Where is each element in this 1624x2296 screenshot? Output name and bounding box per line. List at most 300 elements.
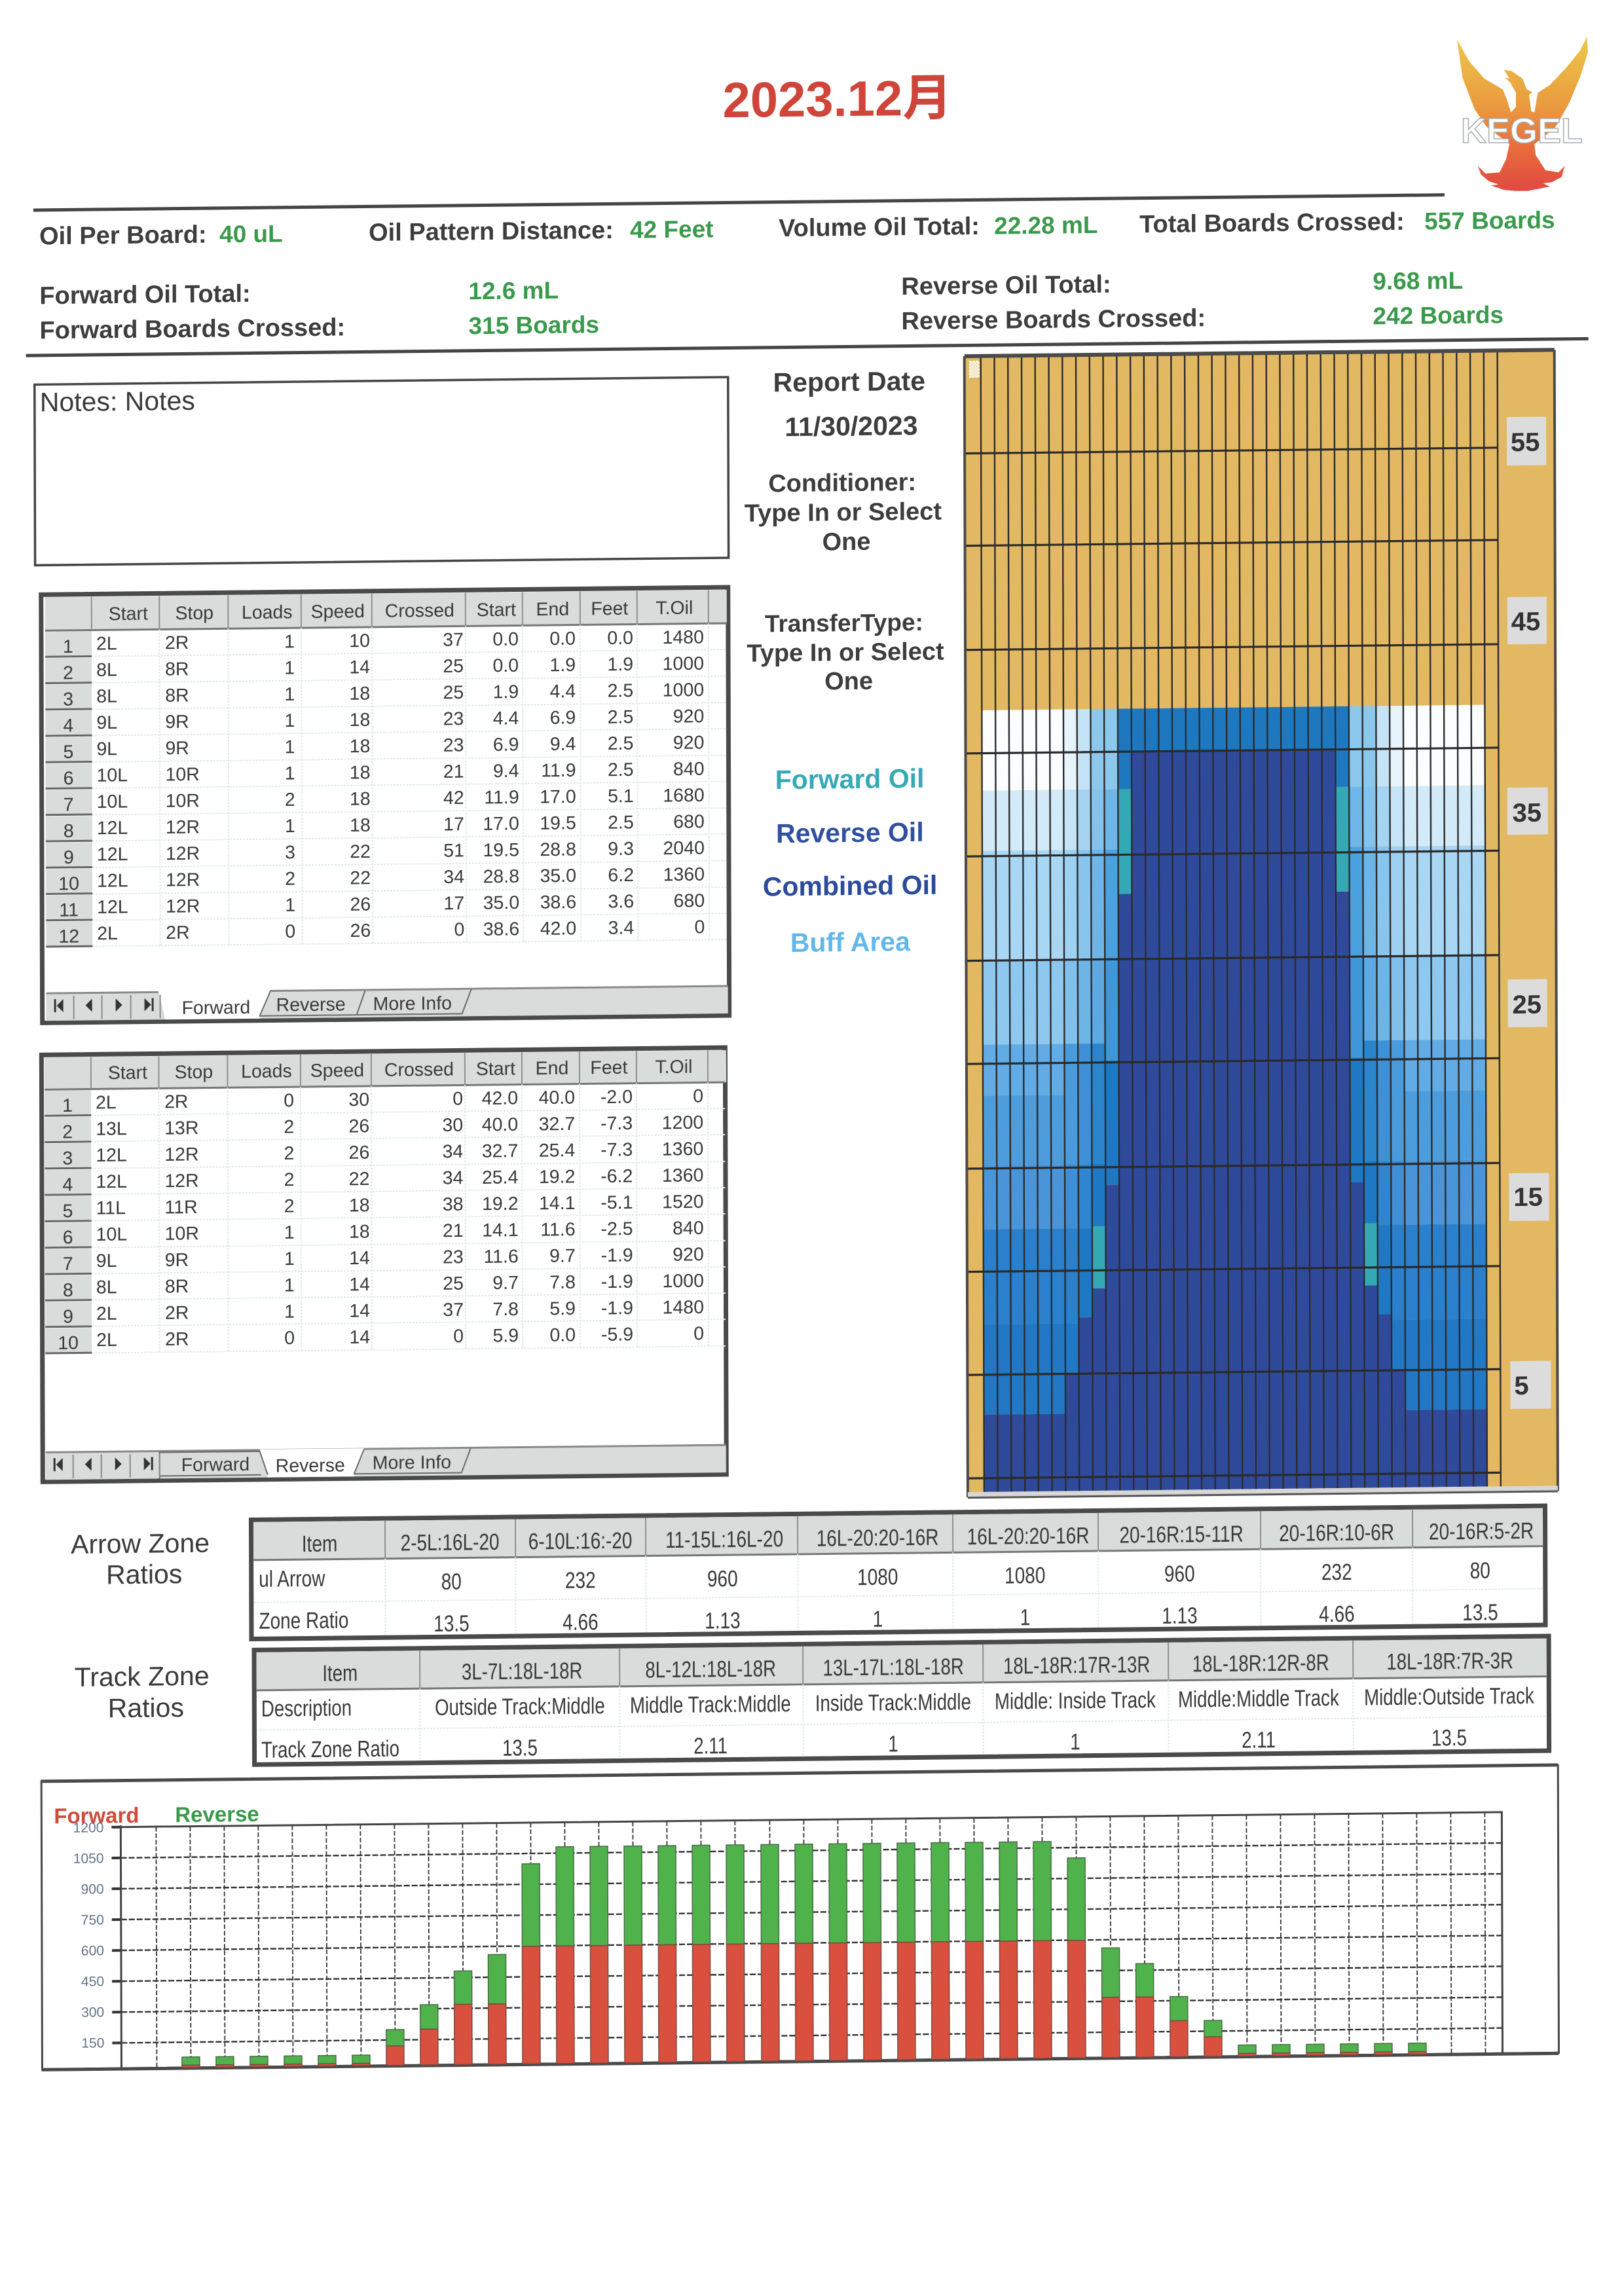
forward table rows: 0.0 <box>492 655 519 676</box>
reverse table rows: 0.0 <box>549 1324 576 1346</box>
reverse table rows: 10L <box>96 1224 127 1245</box>
reverse table rows: 34 <box>443 1167 464 1189</box>
chart legend: Reverse <box>175 1802 259 1827</box>
forward table rows: 2R <box>165 632 189 653</box>
forward table rows: 4.4 <box>550 681 576 702</box>
forward table rows: 6.9 <box>493 734 519 756</box>
forward table rows: 2.5 <box>608 759 634 780</box>
forward table rows: 1 <box>284 657 295 679</box>
arrow zone ratio row: Zone Ratio <box>259 1607 348 1634</box>
reverse table header: Crossed <box>384 1059 454 1081</box>
report info: date: Report Date <box>773 366 925 397</box>
reverse table rows: 25.4 <box>539 1140 575 1161</box>
track zone ratios heading: Ratios <box>108 1692 184 1723</box>
y axis labels: 1200 <box>73 1820 103 1836</box>
transfer type block: One <box>824 668 873 695</box>
reverse table rows: 14 <box>349 1300 370 1322</box>
distance marker 5: 5 <box>1514 1372 1529 1400</box>
forward table rows: 4 <box>63 716 73 737</box>
reverse table rows: 42.0 <box>482 1088 518 1109</box>
reverse table rows: 19.2 <box>482 1194 519 1214</box>
forward table header: Stop <box>175 603 213 624</box>
arrow zone header row: 6-10L:16:-20 <box>528 1527 633 1554</box>
distance marker 5 <box>1510 1360 1551 1409</box>
arrow zone ul arrow row: ul Arrow <box>259 1565 325 1592</box>
reverse table rows: -6.2 <box>600 1166 633 1187</box>
forward table rows: 18 <box>349 683 370 704</box>
forward table rows: 12L <box>97 818 128 839</box>
track zone description row: Middle:Outside Track <box>1364 1683 1534 1710</box>
forward table rows: 0 <box>454 919 464 940</box>
forward table rows: 1 <box>284 684 295 705</box>
arrow zone ul arrow row: 1080 <box>857 1563 898 1590</box>
track zone description row <box>261 1682 1534 1722</box>
forward table rows: 920 <box>673 706 704 727</box>
reverse table sheet tabs: Forward <box>181 1454 249 1476</box>
forward table rows: 18 <box>350 710 370 731</box>
reverse table rows: 14 <box>349 1327 370 1348</box>
reverse table rows: 920 <box>673 1244 704 1266</box>
reverse table header: Loads <box>241 1061 292 1082</box>
forward table rows: 5.1 <box>608 786 634 807</box>
arrow zone ratio row: 4.66 <box>563 1609 599 1635</box>
forward table rows: 1.9 <box>549 655 576 676</box>
oil pattern lane graph <box>965 348 1558 1499</box>
reverse table rows: 40.0 <box>539 1087 575 1108</box>
forward table rows: 12R <box>166 869 200 891</box>
arrow zone ul arrow row: 80 <box>1470 1557 1490 1584</box>
forward table header: T.Oil <box>655 598 693 619</box>
header rule top <box>33 193 1445 211</box>
forward table rows: 9L <box>96 712 117 733</box>
forward table rows: 3 <box>63 689 73 710</box>
arrow zone header row: Item <box>302 1530 337 1557</box>
forward table rows: 10L <box>97 765 128 786</box>
forward table rows: 3 <box>285 842 295 863</box>
forward totals: 315 Boards <box>468 311 599 339</box>
track zone header row: Item <box>322 1660 358 1686</box>
y axis labels: 450 <box>81 1974 104 1990</box>
forward table rows: 34 <box>443 867 464 888</box>
reverse table rows: 13R <box>164 1118 199 1139</box>
conditioner block: Type In or Select <box>745 498 942 528</box>
forward totals: Forward Boards Crossed: <box>39 314 345 344</box>
forward table rows: 2 <box>285 790 295 811</box>
reverse table rows: 11.6 <box>540 1219 576 1241</box>
forward table rows: 37 <box>443 629 464 651</box>
reverse table rows: -7.3 <box>600 1139 633 1161</box>
y axis labels: 750 <box>81 1912 104 1928</box>
forward table rows: 17.0 <box>483 813 519 835</box>
reverse table rows: 8L <box>96 1277 117 1298</box>
reverse table rows: 22 <box>349 1169 369 1190</box>
reverse table header <box>45 1050 726 1089</box>
forward table rows: 25 <box>443 656 464 677</box>
reverse table header: Stop <box>175 1062 213 1083</box>
arrow zone ratios heading: Ratios <box>106 1559 182 1590</box>
forward table rows: 11.9 <box>484 787 519 809</box>
reverse load table <box>41 1048 728 1482</box>
selected cell marker <box>970 361 979 377</box>
forward table rows: 1000 <box>663 680 704 701</box>
arrow zone ul arrow row: 80 <box>441 1568 462 1595</box>
forward table rows: 10L <box>97 791 128 812</box>
y axis labels: 300 <box>81 2005 104 2020</box>
reverse table rows: 9.7 <box>492 1273 519 1294</box>
forward table rows: 1 <box>285 816 295 837</box>
track zone ratios heading <box>75 1661 210 1724</box>
reverse table rows: 2L <box>96 1092 117 1113</box>
forward table rows: 10R <box>166 764 200 786</box>
forward table rows: 12R <box>166 816 200 838</box>
reverse table rows: 5.9 <box>492 1325 519 1347</box>
forward table rows: 2L <box>97 923 118 944</box>
reverse table sheet tabs: Reverse <box>276 1455 345 1477</box>
reverse table rows: 840 <box>673 1218 704 1239</box>
reverse table header: Start <box>108 1063 147 1084</box>
reverse table rows: 0 <box>693 1085 703 1107</box>
track zone header row: 8L-12L:18L-18R <box>645 1655 776 1683</box>
arrow zone ul arrow row <box>259 1552 1490 1597</box>
reverse oil bars <box>181 1838 1426 2066</box>
reverse table rows: -1.9 <box>601 1298 633 1319</box>
forward table rows: 680 <box>674 890 705 911</box>
right half oil bands <box>1335 705 1487 1488</box>
arrow zone ratio row: 13.5 <box>1462 1599 1498 1626</box>
stats row: oil per board, distance, volume, boards crossed: 40 uL <box>219 220 283 247</box>
arrow zone ul arrow row: 232 <box>565 1567 596 1593</box>
reverse table rows: 3 <box>62 1148 73 1169</box>
reverse table rows: 38 <box>443 1194 464 1215</box>
reverse table rows: 30 <box>442 1115 463 1136</box>
forward table sheet tabs <box>46 985 728 1021</box>
conditioner block <box>745 468 942 557</box>
forward table rows: 9.4 <box>493 761 519 782</box>
reverse table rows: 40.0 <box>482 1114 518 1135</box>
arrow zone header row: 11-15L:16L-20 <box>665 1525 783 1553</box>
forward table rows: 12R <box>166 843 200 864</box>
reverse totals: Reverse Boards Crossed: <box>901 304 1206 335</box>
arrow zone ratio row: 4.66 <box>1319 1601 1355 1627</box>
reverse table sheet tabs: More Info <box>373 1452 451 1474</box>
reverse table rows: 8 <box>63 1280 73 1301</box>
forward table header: Loads <box>242 602 293 623</box>
forward table rows: 1360 <box>663 864 705 885</box>
reverse table rows: -5.9 <box>601 1324 633 1345</box>
reverse table rows: 8R <box>165 1276 189 1297</box>
reverse table header: Start <box>476 1059 515 1080</box>
forward and reverse oil bar chart <box>41 1765 1559 2069</box>
track zone header row: 18L-18R:12R-8R <box>1192 1649 1329 1677</box>
reverse table rows: 10 <box>58 1332 79 1354</box>
arrow zone header row: 16L-20:20-16R <box>817 1524 939 1551</box>
forward table header: Crossed <box>385 600 454 622</box>
forward table rows: 1 <box>284 631 295 652</box>
forward table rows: 10 <box>58 873 79 894</box>
logo wordmark: KEGEL <box>1461 111 1583 151</box>
forward table rows: 920 <box>673 732 704 754</box>
track zone ratio row: 2.11 <box>1242 1726 1276 1753</box>
distance marker 55: 55 <box>1511 428 1540 457</box>
track zone header row: 13L-17L:18L-18R <box>823 1653 964 1681</box>
reverse table rows: 34 <box>443 1141 463 1162</box>
report info: date <box>773 366 925 442</box>
reverse table rows: 18 <box>349 1195 370 1216</box>
forward table rows: 18 <box>350 762 371 784</box>
track zone ratio row <box>261 1724 1467 1764</box>
oil legend: Buff Area <box>790 926 911 958</box>
stats row: oil per board, distance, volume, boards crossed: Total Boards Crossed: <box>1139 208 1405 238</box>
arrow zone ul arrow row: 960 <box>707 1565 738 1592</box>
arrow zone ratio row: 1 <box>873 1605 883 1631</box>
reverse table rows: 2R <box>164 1091 189 1112</box>
forward table rows: 12 <box>58 926 79 947</box>
forward table rows: 1 <box>63 636 73 657</box>
forward table rows: 0.0 <box>549 629 576 649</box>
forward table rows: 1000 <box>663 653 704 674</box>
forward table sheet tabs: Reverse <box>276 994 346 1015</box>
forward table rows: 9R <box>165 738 189 759</box>
forward table rows: 9 <box>64 847 74 868</box>
forward table rows: 12L <box>97 896 128 918</box>
reverse table rows: 1 <box>284 1248 295 1269</box>
transfer type block <box>747 608 944 697</box>
forward table rows: 3.4 <box>608 917 634 939</box>
forward table rows: 2.5 <box>608 733 633 754</box>
reverse table rows <box>45 1084 704 1354</box>
forward table rows: 8 <box>64 821 74 842</box>
arrow zone header row: 20-16R:15-11R <box>1119 1521 1244 1548</box>
track zone ratio row: 13.5 <box>1431 1724 1467 1751</box>
forward table rows: 17 <box>443 814 464 835</box>
forward table rows: 0 <box>694 917 705 938</box>
forward table rows: 18 <box>350 788 371 810</box>
reverse table rows: 13L <box>96 1118 127 1140</box>
forward table rows: 38.6 <box>483 919 519 940</box>
reverse table rows: 9.7 <box>549 1245 576 1267</box>
reverse table rows: 25 <box>443 1273 464 1294</box>
stats row: oil per board, distance, volume, boards crossed: Volume Oil Total: <box>779 213 980 242</box>
report info: date: 11/30/2023 <box>784 410 918 442</box>
forward table rows: 10 <box>349 630 370 651</box>
forward table rows: 51 <box>443 840 464 862</box>
reverse table rows: -2.5 <box>600 1218 633 1240</box>
arrow zone ratios heading <box>71 1528 210 1590</box>
reverse table rows: 2 <box>284 1117 294 1138</box>
reverse table rows: 2 <box>62 1121 73 1142</box>
forward table rows: 26 <box>350 894 371 915</box>
track zone description row: Outside Track:Middle <box>435 1692 605 1721</box>
conditioner block: One <box>822 528 871 556</box>
transfer type block: Type In or Select <box>747 638 944 668</box>
reverse table rows: 7.8 <box>492 1299 519 1320</box>
reverse table rows: -1.9 <box>601 1271 633 1292</box>
reverse table rows: 4 <box>62 1175 73 1195</box>
forward table rows: 19.5 <box>483 839 519 861</box>
reverse totals: 9.68 mL <box>1373 267 1463 295</box>
reverse table rows: -5.1 <box>600 1192 633 1213</box>
reverse table rows: 1480 <box>663 1297 704 1319</box>
forward table rows: 17.0 <box>540 786 576 808</box>
oil legend: Combined Oil <box>763 870 937 902</box>
forward table rows: 11.9 <box>541 760 576 781</box>
forward table rows: 6.9 <box>550 707 576 729</box>
forward table rows: 26 <box>350 920 371 941</box>
track zone description row: Middle:Middle Track <box>1178 1685 1339 1712</box>
reverse table rows: 14 <box>349 1274 370 1295</box>
reverse table rows: 32.7 <box>482 1140 518 1162</box>
forward table rows: 680 <box>673 811 705 833</box>
forward table rows: 3.6 <box>608 891 634 913</box>
forward table rows: 4.4 <box>493 708 519 729</box>
forward table rows: 2040 <box>663 837 705 859</box>
oil legend <box>762 763 938 958</box>
reverse table rows: 2L <box>96 1303 117 1324</box>
forward table rows: 22 <box>350 841 371 862</box>
forward table header: End <box>536 599 569 620</box>
distance marker 25: 25 <box>1512 991 1541 1019</box>
forward table rows: 23 <box>443 735 464 756</box>
reverse totals: Reverse Oil Total: <box>901 271 1111 301</box>
track zone ratio row: 1 <box>1070 1728 1080 1755</box>
reverse totals: 242 Boards <box>1373 301 1504 329</box>
forward table rows: 8R <box>165 659 189 680</box>
lane oil colour bands <box>982 705 1487 1492</box>
arrow zone header row: 2-5L:16L-20 <box>401 1529 500 1556</box>
forward table header <box>45 590 727 630</box>
reverse table rows: 0 <box>693 1323 704 1344</box>
reverse table rows: 2 <box>284 1143 294 1164</box>
reverse table rows: 1520 <box>662 1192 704 1212</box>
y axis labels: 900 <box>81 1882 104 1897</box>
reverse table rows: 0 <box>284 1090 294 1111</box>
stats row: oil per board, distance, volume, boards crossed: 22.28 mL <box>994 211 1098 240</box>
forward load table <box>41 587 729 1023</box>
forward table rows: 9L <box>96 738 117 759</box>
forward table rows: 23 <box>443 708 464 729</box>
arrow zone ratios table <box>251 1506 1545 1639</box>
reverse table rows: 6 <box>63 1227 73 1248</box>
forward table rows: 2.5 <box>608 706 633 728</box>
reverse table rows: 25.4 <box>482 1167 519 1188</box>
header rule bottom <box>26 337 1589 357</box>
reverse table rows: 9 <box>63 1306 73 1327</box>
reverse table rows: 12L <box>96 1145 127 1166</box>
forward table rows: 7 <box>64 794 74 815</box>
reverse table rows: 37 <box>443 1300 464 1321</box>
reverse table rows: 0 <box>284 1328 295 1349</box>
stats row: oil per board, distance, volume, boards crossed: 42 Feet <box>630 215 714 244</box>
reverse table rows: 19.2 <box>539 1166 575 1188</box>
forward table sheet tabs: More Info <box>373 993 452 1015</box>
forward table rows: 12L <box>97 844 128 865</box>
arrow zone ul arrow row: 960 <box>1164 1560 1195 1587</box>
reverse table rows: 14.1 <box>539 1193 576 1214</box>
reverse totals <box>901 266 1504 335</box>
reverse table rows: 2R <box>165 1329 189 1350</box>
forward table rows: 0.0 <box>607 628 633 649</box>
forward table rows: 25 <box>443 682 464 703</box>
forward table rows: 14 <box>349 657 370 678</box>
conditioner block: Conditioner: <box>768 469 916 498</box>
distance marker 45 <box>1507 597 1547 644</box>
forward table rows: 28.8 <box>483 866 519 887</box>
notes box: Notes: Notes <box>40 386 195 417</box>
reverse table rows: 2 <box>284 1169 294 1190</box>
forward table rows: 1 <box>284 710 295 731</box>
reverse table rows: 11.6 <box>483 1246 519 1267</box>
forward table rows: 18 <box>350 736 370 757</box>
distance lines <box>965 448 1501 1478</box>
track zone header row: 18L-18R:17R-13R <box>1003 1651 1150 1679</box>
distance marker 45: 45 <box>1511 608 1540 636</box>
forward table rows: 38.6 <box>540 892 576 913</box>
left half oil bands <box>982 708 1134 1492</box>
reverse table rows: 26 <box>349 1142 369 1163</box>
reverse table rows: 7.8 <box>549 1272 576 1293</box>
forward table rows: 11 <box>59 900 79 921</box>
reverse table sheet tabs <box>46 1444 726 1480</box>
forward table rows: 42.0 <box>540 918 576 939</box>
reverse table rows: 2 <box>284 1195 295 1217</box>
y axis labels: 150 <box>81 2035 104 2051</box>
reverse table rows: 11L <box>96 1197 126 1219</box>
transfer type block: TransferType: <box>765 609 923 637</box>
title: 2023.12月 <box>722 70 952 128</box>
forward table rows: 19.5 <box>540 812 576 834</box>
forward table rows: 1 <box>285 737 295 757</box>
forward table rows: 0 <box>285 921 295 942</box>
track zone description row: Middle Track:Middle <box>630 1690 791 1718</box>
forward table rows: 18 <box>350 815 371 836</box>
forward table rows: 1.9 <box>607 654 633 675</box>
forward table rows: 35.0 <box>540 866 576 886</box>
arrow zone ul arrow row: 1080 <box>1005 1562 1045 1588</box>
forward table rows: 6.2 <box>608 865 634 886</box>
forward table rows: 0.0 <box>492 629 519 650</box>
reverse table rows: -2.0 <box>600 1087 633 1108</box>
forward table rows: 1480 <box>663 627 704 648</box>
reverse table rows: 12R <box>164 1144 199 1165</box>
track zone header row <box>322 1647 1513 1686</box>
distance marker 35: 35 <box>1512 799 1541 828</box>
arrow zone header row: 20-16R:5-2R <box>1429 1518 1534 1544</box>
forward table rows: 10R <box>166 790 200 812</box>
track zone ratio row: 13.5 <box>502 1734 538 1761</box>
oil legend: Reverse Oil <box>776 817 924 848</box>
reverse table rows: 9R <box>165 1250 189 1271</box>
arrow zone ratio row <box>259 1594 1498 1639</box>
forward table rows: 840 <box>673 759 705 780</box>
stats row: oil per board, distance, volume, boards crossed <box>39 206 1555 250</box>
forward totals: 12.6 mL <box>468 277 559 304</box>
forward oil bars <box>181 1937 1426 2068</box>
notes box <box>35 377 729 565</box>
forward table rows: 5 <box>63 742 73 763</box>
y axis labels: 600 <box>81 1943 104 1959</box>
reverse table rows: 1360 <box>662 1165 703 1186</box>
forward table rows: 42 <box>443 788 464 809</box>
distance marker 35 <box>1507 788 1548 835</box>
forward table header: Start <box>477 600 516 621</box>
forward table rows: 8R <box>165 685 189 706</box>
forward table rows: 22 <box>350 867 371 889</box>
reverse table rows: -7.3 <box>600 1113 633 1134</box>
reverse table rows: 1 <box>284 1302 295 1322</box>
forward table rows: 6 <box>64 768 74 789</box>
track zone header row: 3L-7L:18L-18R <box>462 1657 582 1685</box>
distance marker 55 <box>1507 417 1546 465</box>
